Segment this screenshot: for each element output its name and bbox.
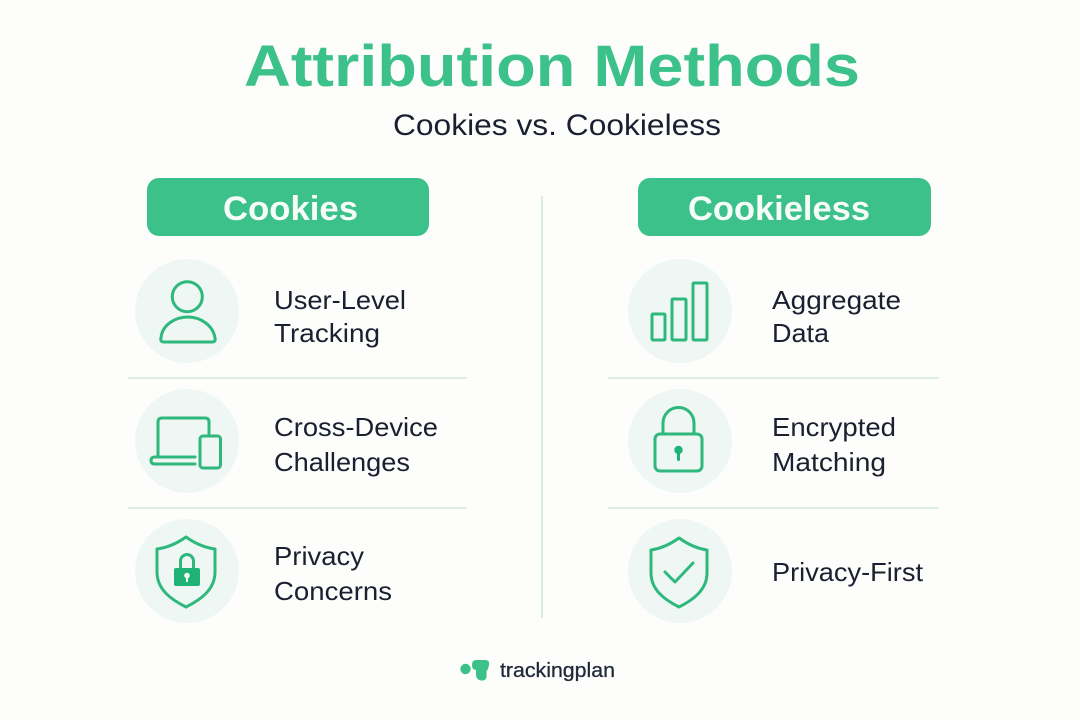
- row: user-level tracking: [135, 259, 406, 363]
- heading: cookieless: Cookieless: [688, 190, 870, 228]
- row: aggregate data: Data: [772, 318, 830, 348]
- row: privacy-first: Privacy-First: [772, 557, 924, 587]
- row: aggregate data: [628, 259, 901, 363]
- row: user-level tracking: Tracking: [274, 318, 380, 348]
- row: cross-device challenges: Cross-Device: [274, 412, 438, 442]
- heading: cookies: [147, 178, 429, 236]
- row: cross-device challenges: Challenges: [274, 447, 410, 477]
- heading: cookies: Cookies: [223, 190, 358, 228]
- subtitle: Cookies vs. Cookieless: [393, 109, 721, 142]
- row: privacy concerns: Privacy: [274, 541, 364, 571]
- icon: logo mark: [460, 660, 489, 681]
- heading: cookieless: [638, 178, 931, 236]
- row: encrypted matching: [628, 389, 896, 493]
- row: user-level tracking: User-Level: [274, 285, 406, 315]
- logo: trackingplan: trackingplan: [500, 659, 615, 682]
- row: privacy concerns: Concerns: [274, 576, 392, 606]
- panel: cookies: [128, 178, 467, 623]
- panel: cookieless: [608, 178, 939, 623]
- row: privacy-first: [628, 519, 924, 623]
- row: privacy concerns: [135, 519, 392, 623]
- row: encrypted matching: Matching: [772, 447, 886, 477]
- title: Attribution Methods: [244, 34, 860, 99]
- row: cross-device challenges: [135, 389, 438, 493]
- row: aggregate data: Aggregate: [772, 285, 901, 315]
- row: encrypted matching: Encrypted: [772, 412, 896, 442]
